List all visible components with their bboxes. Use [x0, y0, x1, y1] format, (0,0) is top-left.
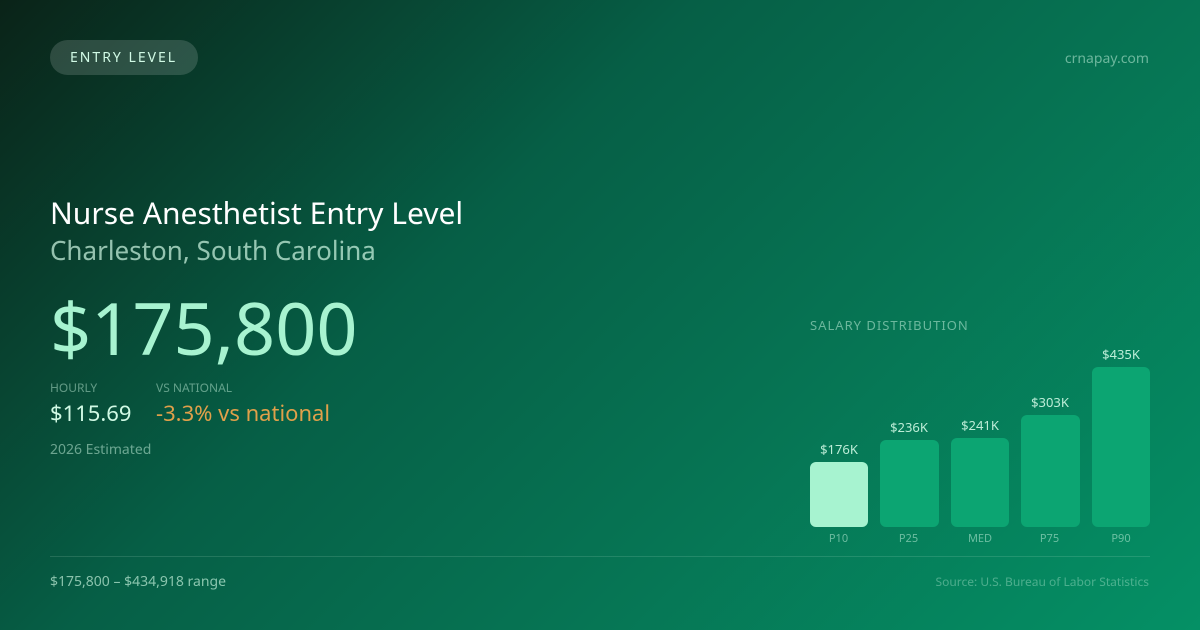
P25 bar	[880, 440, 939, 527]
badge: entry level	[50, 40, 198, 75]
P90 label: P90	[1111, 531, 1131, 546]
stat: hourly	[50, 379, 131, 428]
title: Nurse Anesthetist Entry Level	[50, 192, 463, 233]
stat: vs national	[156, 379, 330, 428]
P25 value: $236K	[890, 418, 928, 436]
footer divider	[50, 556, 1150, 557]
P75 bar	[1021, 415, 1080, 527]
chart heading: SALARY DISTRIBUTION	[810, 316, 969, 334]
headline salary: $175,800	[50, 279, 358, 377]
MED value: $241K	[961, 416, 999, 434]
hourly value: $115.69	[50, 398, 131, 428]
P10 label: P10	[829, 531, 848, 546]
vs national label: VS NATIONAL	[156, 379, 232, 396]
year note: 2026 Estimated	[50, 440, 151, 459]
badge text: ENTRY LEVEL	[70, 48, 177, 67]
range text: $175,800 – $434,918 range	[50, 572, 226, 591]
hourly label: HOURLY	[50, 379, 97, 396]
P75 label: P75	[1040, 531, 1059, 546]
location subtitle: Charleston, South Carolina	[50, 232, 376, 268]
bar chart: salary distribution	[810, 316, 1150, 546]
site name: crnapay.com	[1065, 49, 1149, 68]
P10 value: $176K	[820, 440, 858, 458]
MED label: MED	[968, 531, 992, 546]
P25 label: P25	[899, 531, 918, 546]
MED bar	[951, 438, 1009, 527]
P90 bar	[1092, 367, 1150, 527]
vs national value: -3.3% vs national	[156, 398, 330, 428]
P75 value: $303K	[1031, 393, 1069, 411]
P90 value: $435K	[1102, 345, 1140, 363]
P10 bar	[810, 462, 868, 527]
source text: Source: U.S. Bureau of Labor Statistics	[936, 573, 1149, 590]
